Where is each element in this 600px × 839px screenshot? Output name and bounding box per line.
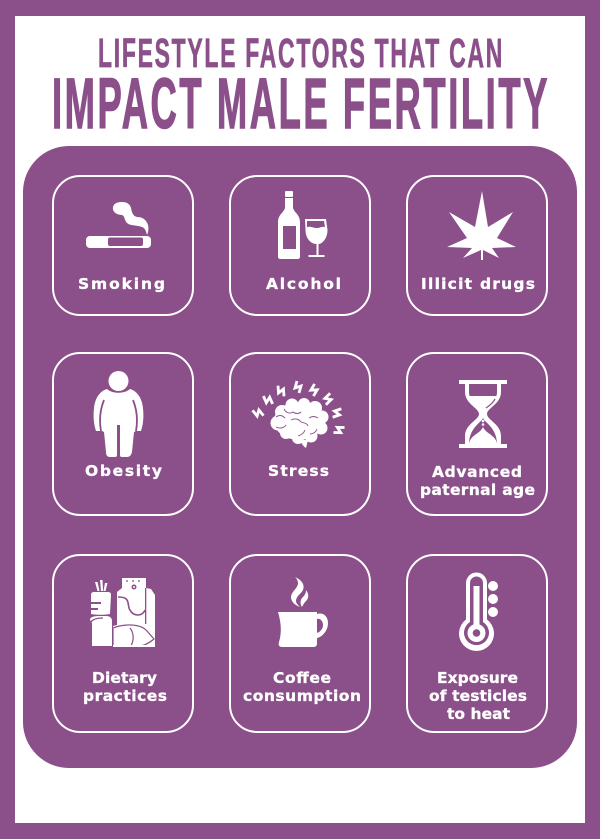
card: exposure of testicles to heat xyxy=(407,555,547,732)
label: Advanced xyxy=(432,463,522,481)
icon: coffee cup xyxy=(278,577,328,647)
label xyxy=(420,463,535,499)
label: to heat xyxy=(447,705,511,723)
title xyxy=(52,30,550,144)
card: coffee consumption xyxy=(230,555,370,732)
card: alcohol xyxy=(230,176,370,315)
label: paternal age xyxy=(420,481,535,499)
panel: lifestyle factors xyxy=(23,146,577,768)
icon: bottle and wine glass xyxy=(278,191,328,259)
icon: overweight figure xyxy=(94,371,143,457)
label: practices xyxy=(83,687,167,705)
card: advanced paternal age xyxy=(407,353,547,515)
icon: cigarette xyxy=(86,202,151,248)
icon: brain with lightning bolts xyxy=(251,381,346,448)
icon: thermometer xyxy=(459,572,498,651)
icon: cannabis leaf xyxy=(447,191,516,260)
card: illicit drugs xyxy=(407,176,547,315)
icon: hourglass xyxy=(459,380,507,448)
label: Illicit drugs xyxy=(421,275,535,293)
card: obesity xyxy=(53,353,193,515)
card: stress xyxy=(230,353,370,515)
card: smoking xyxy=(53,176,193,315)
label: Obesity xyxy=(85,462,162,480)
label: Coffee xyxy=(273,669,331,687)
label xyxy=(83,669,167,705)
label xyxy=(243,669,361,705)
label: Alcohol xyxy=(266,275,341,293)
label: Stress xyxy=(268,462,329,480)
card: dietary practices xyxy=(53,555,193,732)
label: of testicles xyxy=(429,687,527,705)
label xyxy=(429,669,527,723)
label: Smoking xyxy=(78,275,165,293)
label: Exposure xyxy=(437,669,518,687)
label: Dietary xyxy=(92,669,157,687)
icon: food group xyxy=(90,578,155,647)
label: consumption xyxy=(243,687,361,705)
